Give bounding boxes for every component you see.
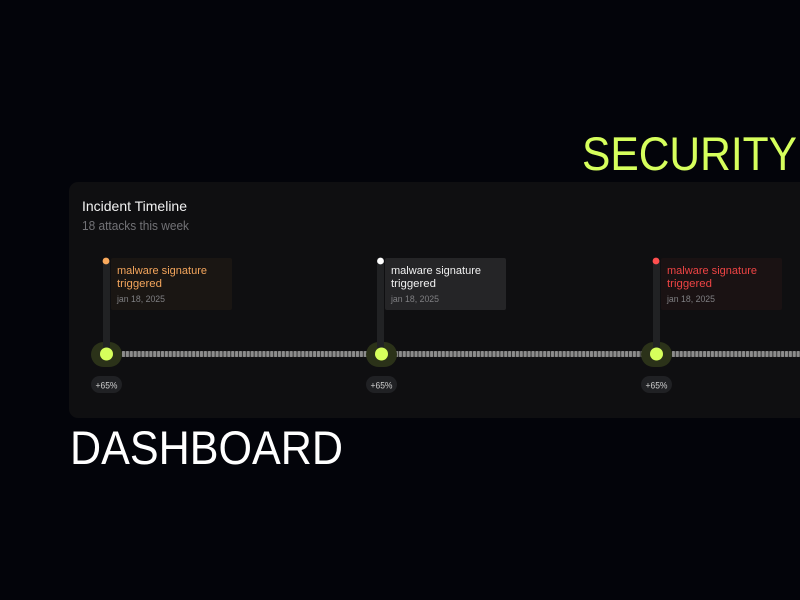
timeline track [122,351,800,357]
event 3: red [641,258,782,393]
event 3: red: jan 18, 2025 [666,294,715,305]
event 1: orange: malware signature [117,265,207,277]
attacks count: 18 attacks this week [82,219,190,233]
event 3: red: triggered [667,278,712,290]
event 1: orange: jan 18, 2025 [116,294,165,305]
event 1: orange: triggered [117,278,162,290]
event 2: white: jan 18, 2025 [390,294,439,305]
event 2: white: malware signature [391,265,481,277]
event 2: white [366,258,506,393]
event 2: white: +65% [370,380,392,390]
event 3: red: malware signature [667,265,757,277]
panel: incident timeline [69,182,800,418]
event 1: orange: +65% [96,380,118,390]
panel heading: Incident Timeline [82,198,187,214]
event 3: red: +65% [646,380,668,390]
event 2: white: triggered [391,278,436,290]
title: dashboard: DASHBOARD [70,421,343,474]
event 1: orange [91,258,232,393]
